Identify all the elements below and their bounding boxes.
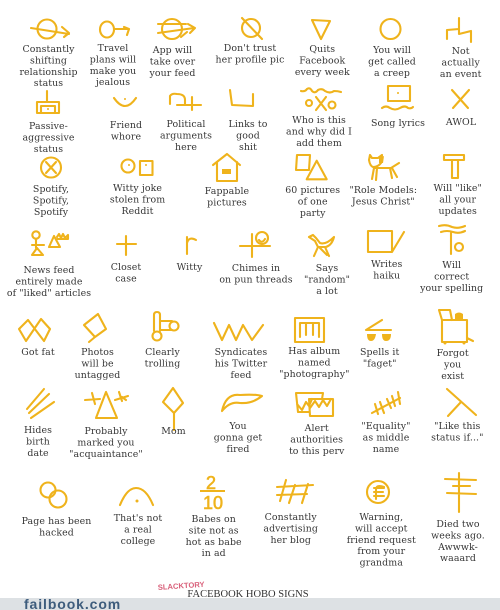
sign: AWOL bbox=[445, 90, 476, 128]
label: Forgot bbox=[437, 348, 469, 359]
label: arguments bbox=[160, 130, 212, 141]
icon: figure and triangle bbox=[32, 231, 68, 255]
label: your spelling bbox=[419, 283, 483, 294]
sign: fired bbox=[214, 395, 262, 455]
label: shit bbox=[239, 142, 257, 153]
label: here bbox=[175, 142, 197, 153]
label: Got fat bbox=[21, 347, 55, 358]
slacktory logo: SLACKTORY bbox=[158, 580, 205, 592]
sign: hacked bbox=[22, 482, 91, 538]
label: Will bbox=[442, 260, 461, 271]
sign: died bbox=[431, 473, 485, 564]
sign: grandma bbox=[347, 481, 416, 569]
title: FACEBOOK HOBO SIGNS bbox=[187, 589, 309, 600]
label: stolen from bbox=[110, 194, 165, 205]
icon: cross with smiley bbox=[240, 232, 270, 257]
label: News feed bbox=[23, 265, 75, 276]
icon: box with stem bbox=[37, 91, 59, 113]
label: Spotify bbox=[34, 207, 69, 218]
sign: Spotify bbox=[33, 158, 69, 218]
label: shifting bbox=[30, 55, 67, 66]
label: plans will bbox=[90, 54, 136, 65]
icon: bars and circles bbox=[152, 312, 178, 340]
label: Don't trust bbox=[224, 43, 276, 54]
label: App will bbox=[152, 45, 192, 56]
label: Alert bbox=[304, 423, 329, 434]
label: Photos bbox=[81, 347, 114, 358]
label: status bbox=[34, 78, 63, 89]
sign: album bbox=[279, 318, 350, 380]
sign: event bbox=[440, 18, 482, 80]
label: gonna get bbox=[214, 432, 262, 443]
label: Writes bbox=[371, 259, 402, 270]
label: Spells it bbox=[360, 347, 400, 358]
label: 60 pictures bbox=[285, 185, 340, 196]
sign: travel plans bbox=[90, 22, 136, 88]
sign: faget bbox=[360, 320, 400, 369]
label: Quits bbox=[309, 44, 335, 55]
label: a lot bbox=[316, 286, 338, 297]
label: pictures bbox=[207, 197, 247, 208]
sign: passive-aggressive bbox=[22, 91, 75, 155]
label: an event bbox=[440, 69, 482, 80]
sign: photos bbox=[75, 314, 120, 381]
sign: says random bbox=[304, 235, 350, 297]
label: birth bbox=[26, 436, 50, 447]
label: Reddit bbox=[122, 206, 154, 217]
label: "random" bbox=[304, 274, 350, 285]
icon: circle with arrow bbox=[31, 20, 69, 38]
label: good bbox=[236, 130, 260, 141]
label: Witty bbox=[177, 262, 203, 273]
label: will be bbox=[81, 358, 114, 369]
label: as middle bbox=[363, 432, 410, 443]
label: Spotify, bbox=[33, 184, 69, 195]
label: exist bbox=[441, 371, 464, 382]
sign: creep bbox=[368, 19, 416, 79]
label: Has album bbox=[288, 346, 340, 357]
icon: waves and pole bbox=[439, 225, 465, 254]
label: Fappable bbox=[205, 186, 250, 197]
label: Friend bbox=[110, 120, 142, 131]
sign: haiku bbox=[368, 231, 404, 281]
label: Constantly bbox=[22, 44, 75, 55]
label: "photography" bbox=[279, 369, 350, 380]
sign: fappable bbox=[205, 154, 250, 208]
sign: forgot you exist bbox=[437, 310, 473, 382]
label: her blog bbox=[270, 535, 311, 546]
label: "acquaintance" bbox=[69, 449, 143, 460]
label: You will bbox=[372, 45, 411, 56]
icon: square and slash bbox=[368, 231, 404, 252]
label: hot as babe bbox=[186, 537, 242, 548]
label: untagged bbox=[75, 370, 120, 381]
sign: closet case bbox=[111, 236, 141, 284]
label: Will "like" bbox=[433, 183, 482, 194]
label: Spotify, bbox=[33, 195, 69, 206]
label: haiku bbox=[373, 270, 400, 281]
icon: zigzag bbox=[214, 323, 263, 340]
sign: babes bbox=[186, 473, 242, 559]
label: party bbox=[300, 208, 326, 219]
icon: X in circle bbox=[41, 158, 61, 178]
icon: branching line bbox=[447, 389, 476, 416]
label: on pun threads bbox=[219, 274, 293, 285]
label: "Like this bbox=[434, 421, 481, 432]
icon: r bbox=[187, 237, 196, 254]
sign: app bbox=[149, 19, 196, 79]
label: add them bbox=[296, 138, 342, 149]
label: from your bbox=[357, 546, 406, 557]
sign: real college bbox=[114, 488, 162, 547]
label: every week bbox=[295, 67, 350, 78]
sign: twitter feed bbox=[214, 323, 268, 381]
label: correct bbox=[434, 271, 469, 282]
label: actually bbox=[442, 57, 480, 68]
label: your feed bbox=[149, 68, 195, 79]
sign: witty joke bbox=[110, 160, 165, 217]
label: get called bbox=[368, 56, 416, 67]
icon: square and triangle bbox=[296, 155, 327, 179]
icon: diamond with tail bbox=[84, 314, 106, 342]
icon: circle and square bbox=[122, 160, 152, 175]
label: jealous bbox=[95, 77, 130, 88]
icon: T bbox=[444, 155, 464, 178]
sign: friend whore bbox=[110, 98, 142, 142]
icon: X bbox=[452, 90, 469, 108]
sign: political bbox=[160, 94, 212, 153]
icon: triangle with branches bbox=[85, 392, 128, 418]
label: Mom bbox=[161, 426, 186, 437]
icon: bracket bbox=[447, 18, 471, 42]
sign: equality bbox=[361, 392, 411, 455]
icon: hash bbox=[277, 480, 313, 503]
sign: relationship status bbox=[19, 20, 78, 89]
label: Political bbox=[166, 119, 206, 130]
label: named bbox=[298, 357, 331, 368]
icon: slashed circle bbox=[242, 18, 262, 39]
icon: arc and dot bbox=[120, 488, 153, 505]
sign: profile pic bbox=[216, 18, 284, 65]
icon: box and wave bbox=[382, 86, 413, 110]
icon: triangle bbox=[312, 20, 330, 39]
icon: bird bbox=[309, 235, 334, 256]
label: college bbox=[121, 536, 156, 547]
icon: circle bbox=[380, 19, 400, 39]
label: Syndicates bbox=[215, 347, 267, 358]
icon: antenna bbox=[445, 473, 476, 512]
label: status bbox=[34, 144, 63, 155]
icon: jagged frames bbox=[296, 393, 333, 416]
icon: house bbox=[213, 154, 240, 181]
label: AWOL bbox=[445, 117, 476, 128]
sign: blog bbox=[263, 480, 318, 546]
label: "faget" bbox=[363, 358, 397, 369]
label: Says bbox=[316, 263, 338, 274]
label: his Twitter bbox=[215, 358, 268, 369]
label: Song lyrics bbox=[371, 118, 425, 129]
label: Facebook bbox=[299, 55, 346, 66]
label: Closet bbox=[111, 262, 141, 273]
label: You bbox=[228, 421, 247, 432]
label: a creep bbox=[374, 68, 410, 79]
sign: mom bbox=[161, 388, 186, 437]
label: Awwwk- bbox=[437, 542, 478, 553]
sign: witty bbox=[177, 237, 203, 273]
label: Witty joke bbox=[113, 183, 162, 194]
icon: cat bbox=[369, 155, 399, 180]
sign: quits bbox=[295, 20, 350, 78]
label: Chimes in bbox=[232, 263, 280, 274]
label: Warning, bbox=[359, 512, 403, 523]
label: grandma bbox=[360, 558, 403, 569]
label: hacked bbox=[39, 527, 74, 538]
label: in ad bbox=[202, 548, 226, 559]
icon: circled E bbox=[367, 481, 389, 503]
label: will accept bbox=[355, 523, 408, 534]
icon: linked circles bbox=[40, 482, 66, 508]
label: Jesus Christ" bbox=[351, 196, 415, 207]
label: to this perv bbox=[289, 446, 345, 457]
sign: links bbox=[229, 90, 268, 153]
label: feed bbox=[231, 370, 251, 381]
sign: birth date bbox=[24, 389, 54, 459]
label: a real bbox=[124, 524, 152, 535]
label: you bbox=[443, 359, 461, 370]
icon: ribbon diamonds bbox=[19, 319, 50, 341]
label: her profile pic bbox=[216, 54, 284, 65]
sign: got fat bbox=[19, 319, 55, 358]
sign: 60 pictures bbox=[285, 155, 340, 219]
label: trolling bbox=[145, 358, 180, 369]
label: Hides bbox=[24, 425, 52, 436]
icon: cart bbox=[439, 310, 473, 344]
sign: song lyrics bbox=[371, 86, 425, 129]
label: site not as bbox=[189, 525, 239, 536]
footer band bbox=[0, 596, 500, 610]
icon: diamond on stem bbox=[163, 388, 183, 430]
label: Page has been bbox=[22, 516, 91, 527]
label: advertising bbox=[263, 523, 318, 534]
label: Babes on bbox=[192, 514, 236, 525]
label: authorities bbox=[290, 434, 343, 445]
label: Not bbox=[452, 46, 470, 57]
icon: framed bars bbox=[295, 318, 324, 342]
label: whore bbox=[111, 131, 141, 142]
sign: correct spelling bbox=[419, 225, 483, 294]
sign: role models bbox=[349, 155, 417, 207]
label: all your bbox=[439, 194, 477, 205]
label: weeks ago. bbox=[431, 530, 485, 541]
sign: alert bbox=[289, 393, 345, 457]
label: friend request bbox=[347, 535, 416, 546]
label: Who is this bbox=[292, 115, 346, 126]
label: waaard bbox=[440, 553, 476, 564]
icon: two tenths: 10 bbox=[203, 493, 223, 513]
label: Probably bbox=[84, 426, 128, 437]
icon: wave and o-x-o bbox=[301, 88, 341, 110]
sign: news feed bbox=[7, 231, 91, 299]
icon: crossed circle arrow bbox=[158, 19, 195, 39]
icon: two tenths: 2 bbox=[206, 473, 216, 493]
label: aggressive bbox=[22, 132, 75, 143]
label: make you bbox=[90, 66, 136, 77]
label: take over bbox=[150, 56, 196, 67]
icon: glasses bbox=[366, 320, 391, 341]
label: Links to bbox=[229, 119, 268, 130]
icon: ticked line bbox=[372, 392, 400, 414]
label: entirely made bbox=[16, 276, 83, 287]
label: Passive- bbox=[29, 121, 68, 132]
sign: chimes in bbox=[219, 232, 293, 285]
label: of one bbox=[298, 196, 328, 207]
label: Constantly bbox=[265, 512, 317, 523]
icon: three diagonals bbox=[27, 389, 54, 418]
label: name bbox=[373, 444, 400, 455]
label: "Role Models: bbox=[349, 185, 417, 196]
label: case bbox=[115, 273, 137, 284]
label: updates bbox=[438, 206, 477, 217]
label: date bbox=[27, 448, 49, 459]
label: "Equality" bbox=[361, 421, 411, 432]
label: marked you bbox=[77, 437, 135, 448]
label: That's not bbox=[114, 513, 162, 524]
icon: two tenths bbox=[200, 473, 225, 513]
label: Travel bbox=[98, 43, 128, 54]
label: Died two bbox=[436, 519, 480, 530]
icon: open bracket bbox=[230, 90, 253, 106]
label: of "liked" articles bbox=[7, 288, 91, 299]
sign: trolling bbox=[145, 312, 180, 369]
label: relationship bbox=[19, 67, 78, 78]
label: and why did I bbox=[286, 126, 352, 137]
label: status if..." bbox=[431, 432, 484, 443]
sign: like this status bbox=[431, 389, 484, 443]
sign: who is this bbox=[286, 88, 352, 149]
icon: arc and dot bbox=[114, 98, 136, 106]
label: fired bbox=[226, 444, 250, 455]
sign: will like bbox=[433, 155, 482, 217]
icon: circle arrow bbox=[100, 22, 129, 38]
sign: acquaintance bbox=[69, 392, 143, 460]
icon: crescent bbox=[222, 395, 262, 411]
icon: plus bbox=[117, 236, 136, 255]
icon: curve and cross bbox=[170, 94, 201, 110]
label: Clearly bbox=[145, 347, 180, 358]
